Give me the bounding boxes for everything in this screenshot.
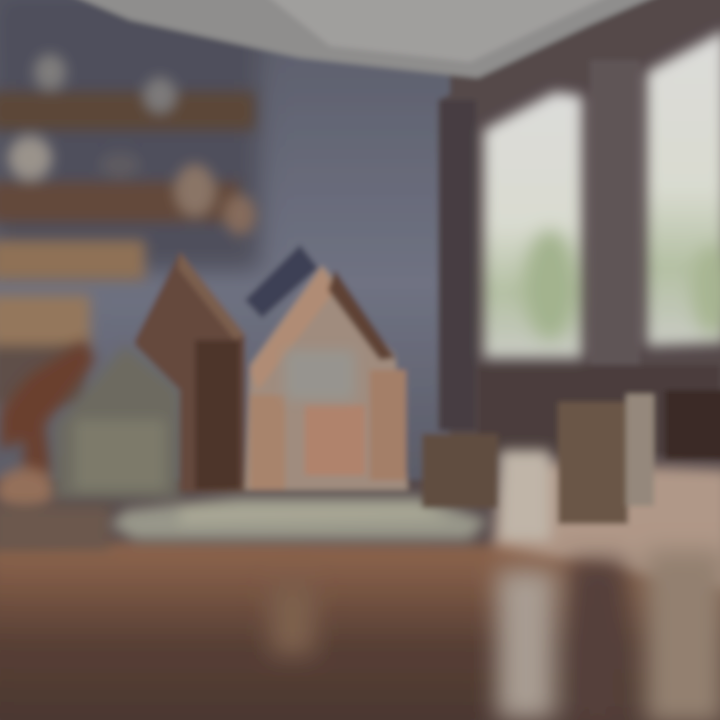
model house: grey back left xyxy=(55,345,180,500)
window: left xyxy=(484,92,582,358)
model house: dark roof xyxy=(245,245,318,318)
model house: brown xyxy=(135,252,245,492)
window: right xyxy=(647,30,720,346)
ceiling xyxy=(60,0,670,78)
right floor highlight xyxy=(490,450,720,600)
dark pillar and window frame wall xyxy=(438,0,720,470)
box: right xyxy=(558,394,654,524)
base mat under the houses xyxy=(110,497,488,540)
floor xyxy=(0,505,720,720)
small figure at left xyxy=(0,340,95,512)
box: middle xyxy=(422,434,498,508)
shelves with objects xyxy=(0,54,256,405)
model house: light timber xyxy=(245,265,408,490)
floor reflections xyxy=(270,550,720,720)
